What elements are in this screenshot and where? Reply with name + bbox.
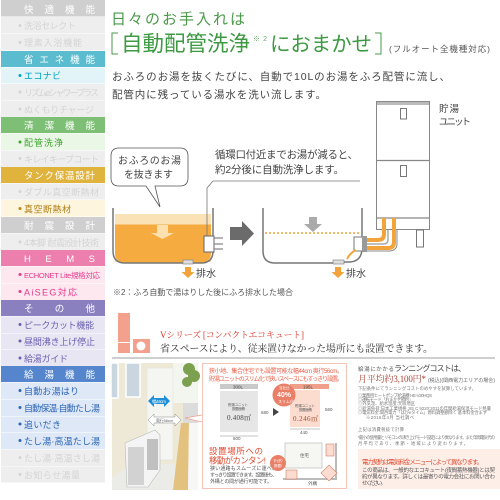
item xyxy=(1,234,105,250)
item: 洗浴セレクト xyxy=(24,20,76,31)
plug xyxy=(204,236,223,252)
300L footprint: 0.408㎡ xyxy=(227,413,251,422)
item xyxy=(1,466,105,482)
plan diagram xyxy=(283,443,337,487)
explanation text xyxy=(215,148,358,176)
pale arrow shape xyxy=(151,225,174,239)
item: ぬくもりチャージ xyxy=(24,105,94,115)
title line 2: ※2 xyxy=(253,35,267,43)
description text xyxy=(112,70,450,101)
tall tank xyxy=(147,368,173,460)
item xyxy=(1,450,105,466)
hot water pipes xyxy=(367,218,397,251)
195L footprint: 440 xyxy=(300,430,308,435)
storage tank unit xyxy=(376,102,430,247)
195L footprint: 560 xyxy=(325,407,333,412)
photo: installation xyxy=(111,363,200,490)
outdoor unit xyxy=(125,430,160,487)
panel: electricity contract note: この商品は、一般的なエコキュート(夜間蓄熱機器)とは契 xyxy=(362,466,495,474)
item: peak cut xyxy=(1,316,105,333)
diagram: bathtub after xyxy=(263,208,367,264)
running cost text: (税込)(関西電力エリアの場合) xyxy=(428,377,495,384)
badge: easy: 設置! xyxy=(274,463,282,468)
running cost text: ◎外気温、給水温度:大阪地区 xyxy=(358,400,416,407)
300L footprint xyxy=(220,384,269,441)
195L footprint: 195L xyxy=(303,384,314,390)
item xyxy=(1,400,105,416)
panel body: 外構との間が通行可能です。 xyxy=(210,478,272,485)
panel: electricity contract note xyxy=(358,449,500,489)
plan diagram: 住宅 xyxy=(300,452,309,458)
arrow: next step xyxy=(230,221,254,246)
pipes over tank xyxy=(382,218,396,230)
ground xyxy=(112,464,175,490)
title line 2 xyxy=(112,32,381,56)
tank label xyxy=(439,103,471,128)
explanation text: 約2分後に自動洗浄します。 xyxy=(215,163,344,176)
description text: 配管内に残っている湯水を洗い流します。 xyxy=(112,88,326,101)
header: cleanliness: 清潔機能 xyxy=(24,120,95,132)
item: daytime stop: 昼間沸き上げ停止 xyxy=(24,336,95,347)
badge: easy xyxy=(270,455,286,471)
item: 理素入浴機能 xyxy=(24,37,82,48)
gravel strip xyxy=(173,423,189,490)
sky xyxy=(173,363,198,403)
195L footprint: 設置面積 xyxy=(299,407,312,412)
speech bubble: を抜きます xyxy=(124,168,173,181)
speech bubble: おふろのお湯 xyxy=(118,154,181,167)
item xyxy=(1,416,105,432)
title line 2: 自動配管洗浄 xyxy=(121,32,250,56)
header: energy saving: 省エネ機能 xyxy=(24,54,95,66)
width arrow blue: 幅44cm xyxy=(152,398,166,405)
item: vacuum insulation: 真空断熱材 xyxy=(24,204,71,214)
item: 4本脚 耐震設計技術 xyxy=(24,237,99,248)
header: cleanliness xyxy=(1,117,105,133)
running cost text: 下記条件にてランニングコストのめやすを試算しています。 xyxy=(358,385,476,392)
item: econavi xyxy=(1,68,105,84)
divider xyxy=(112,357,495,359)
drain label 1: 排水 xyxy=(196,267,216,280)
item xyxy=(1,84,105,100)
running cost text: ◎電気料金:関西電力「はぴeタイム」燃料調整額除く 基本料金含まず xyxy=(358,409,487,416)
red intro: 貯湯ユニットのスリム化で狭いスペースにもすっきり設置。 xyxy=(209,375,343,383)
description text: おふろのお湯を抜くたびに、自動で10Lのお湯をふろ配管に流し、 xyxy=(112,70,450,83)
header: other: その他 xyxy=(24,303,95,315)
item: 自動お湯はり xyxy=(24,386,79,396)
badge: 40% slim: 40% xyxy=(277,392,292,399)
tank label: ユニット xyxy=(439,117,471,128)
badge: easy: すっきり xyxy=(273,458,283,463)
item xyxy=(1,184,105,200)
plug xyxy=(354,236,367,252)
sidebar: feature menu xyxy=(1,0,105,482)
tree xyxy=(182,363,200,387)
swoosh xyxy=(347,250,356,259)
badge: 40% slim: スリム化 xyxy=(278,398,294,404)
item: ダブル真空断熱材 xyxy=(24,186,99,198)
red heading: 設置場所への xyxy=(209,446,263,456)
item xyxy=(1,101,105,117)
header: HEMS xyxy=(1,250,105,266)
badge: 40% slim: 当社比 xyxy=(279,385,290,390)
drain xyxy=(183,260,193,264)
badge: 40% slim xyxy=(272,384,296,406)
drain label 2: 排水 xyxy=(346,267,366,280)
header: tank insulation: タンク保温設計 xyxy=(24,170,95,182)
item: たし湯·高温たし湯 xyxy=(24,436,100,446)
item: echonet xyxy=(1,266,105,283)
panel body xyxy=(210,465,277,485)
drain label 2 xyxy=(332,267,366,280)
running cost text: 月平均であり、季節・地域により変わります。 xyxy=(358,440,468,447)
item xyxy=(1,432,105,449)
speech bubble xyxy=(111,148,188,207)
running cost text: ◎運転モード「おまかせ節約」 xyxy=(358,396,413,403)
icon: compact unit xyxy=(118,313,150,353)
header: other xyxy=(1,300,105,316)
header: comfort xyxy=(1,0,105,16)
300L footprint: 680 xyxy=(261,410,269,415)
item: hot water guide: 給湯ガイド xyxy=(24,353,68,364)
title line 1: 日々のお手入れは xyxy=(111,11,245,28)
V series subheading: 省スペースにより、従来置けなかった場所にも設置できます。 xyxy=(160,342,433,355)
header: energy saving xyxy=(1,51,105,67)
drain xyxy=(333,260,344,264)
drain label 1 xyxy=(182,267,216,280)
title line 2: におまかせ xyxy=(270,33,372,56)
running cost text: 上記は消費税抜で計算 xyxy=(358,426,405,433)
diagram: bathtub before xyxy=(113,208,223,264)
callout pointer xyxy=(185,415,202,422)
tank label: 貯湯 xyxy=(439,103,459,115)
item xyxy=(1,150,105,167)
running cost text: ◎業務用ヒートポンプ給湯機 HE-V20HQS xyxy=(358,392,432,399)
item: peak cut: ピークカット機能 xyxy=(24,320,94,330)
running cost text: *最小の使用量とリモコンの沸き上げモード設定により異なります。また年間電気代の xyxy=(358,434,495,441)
header: comfort: 快適機能 xyxy=(24,4,95,16)
item: AiSEG: AiSEG対応 xyxy=(24,286,77,298)
195L footprint: 0.246㎡ xyxy=(293,414,318,423)
header: tank insulation xyxy=(1,167,105,183)
300L footprint: 貯湯ユニット xyxy=(228,402,248,407)
item: hot water guide xyxy=(1,350,105,366)
connector line xyxy=(207,181,360,236)
comparison arrow xyxy=(273,408,279,416)
item: 追いだき xyxy=(24,419,61,430)
panel body: すっきり設置できます。設置後も、 xyxy=(210,472,277,478)
red heading: 移動がカンタン! xyxy=(209,456,266,466)
item: たし湯·高温さし湯 xyxy=(24,452,100,464)
panel: electricity contract note: せください。 xyxy=(362,480,386,487)
running cost text: ランニングコストは、 xyxy=(394,363,466,373)
red intro xyxy=(209,367,343,383)
red intro: 狭小地、集合住宅でも設置可能な幅44cm 奥行56cm。 xyxy=(209,367,343,375)
item: 自動保温·自動たし湯 xyxy=(24,402,100,414)
header: water supply: 給湯機能 xyxy=(24,369,95,381)
header: water supply xyxy=(1,366,105,382)
width arrow white: 奥行56cm xyxy=(156,417,174,423)
header: seismic xyxy=(1,217,105,233)
item: econavi: エコナビ xyxy=(24,71,61,81)
item: daytime stop xyxy=(1,334,105,350)
V series heading: Vシリーズ [コンパクトエコキュート] xyxy=(160,330,304,340)
item xyxy=(1,34,105,50)
explanation text: 循環口付近までお湯が減ると、 xyxy=(215,148,358,161)
item: pipe cleaning: 配管洗浄 xyxy=(24,137,63,148)
item: AiSEG xyxy=(1,284,105,300)
grey down arrow xyxy=(304,217,322,232)
red heading xyxy=(209,446,266,466)
300L footprint: 設置面積 xyxy=(232,406,246,411)
header: HEMS: HEMS xyxy=(24,254,95,265)
dotted water level xyxy=(265,232,360,234)
running cost text: ※2016年4月 当社調べ xyxy=(366,414,415,421)
195L footprint: 貯湯ユニット xyxy=(295,403,315,408)
panel: electricity contract note: 電力契約は電気料金メニューによって異なります。 xyxy=(362,457,483,466)
running cost text: ◎給湯負荷:日本工業規格 JIS C 9220:2011の年間給湯保温モード熱量 xyxy=(358,405,492,412)
running cost text xyxy=(358,363,495,447)
header: seismic: 耐震設計 xyxy=(24,220,95,232)
running cost text: 給湯にかかる xyxy=(358,365,394,373)
all-models note: (フルオート全機種対応) xyxy=(389,44,490,54)
item: リズムeシャワープラス xyxy=(24,87,99,98)
item: pipe cleaning xyxy=(1,134,105,150)
windows xyxy=(111,363,140,398)
300L footprint: 600 xyxy=(233,436,241,441)
item: お知らせ湯量 xyxy=(24,470,80,480)
300L footprint: 300L xyxy=(233,384,244,390)
item: echonet: ECHONET Lite規格対応 xyxy=(24,270,100,280)
plan diagram: 外構 xyxy=(308,480,317,487)
195L footprint xyxy=(290,384,333,435)
tub wall and pipes xyxy=(344,208,362,262)
panel: electricity contract note: 約が異なります。詳しくは最寄りの電力会社にお問い合わ xyxy=(362,472,495,480)
footnote: ※2：ふろ自動で湯はりした後にふろ排水した場合 xyxy=(113,287,293,297)
running cost text: 月平均約3,100円* xyxy=(358,373,426,384)
panel body: 狭い通路もスムーズに運べ、 xyxy=(210,465,277,472)
item xyxy=(1,17,105,34)
item: キレイキープコート xyxy=(24,154,99,164)
item xyxy=(1,382,105,399)
fence xyxy=(183,403,198,423)
panel: space saving xyxy=(202,364,346,488)
item: vacuum insulation xyxy=(1,200,105,216)
white wall xyxy=(188,423,198,490)
